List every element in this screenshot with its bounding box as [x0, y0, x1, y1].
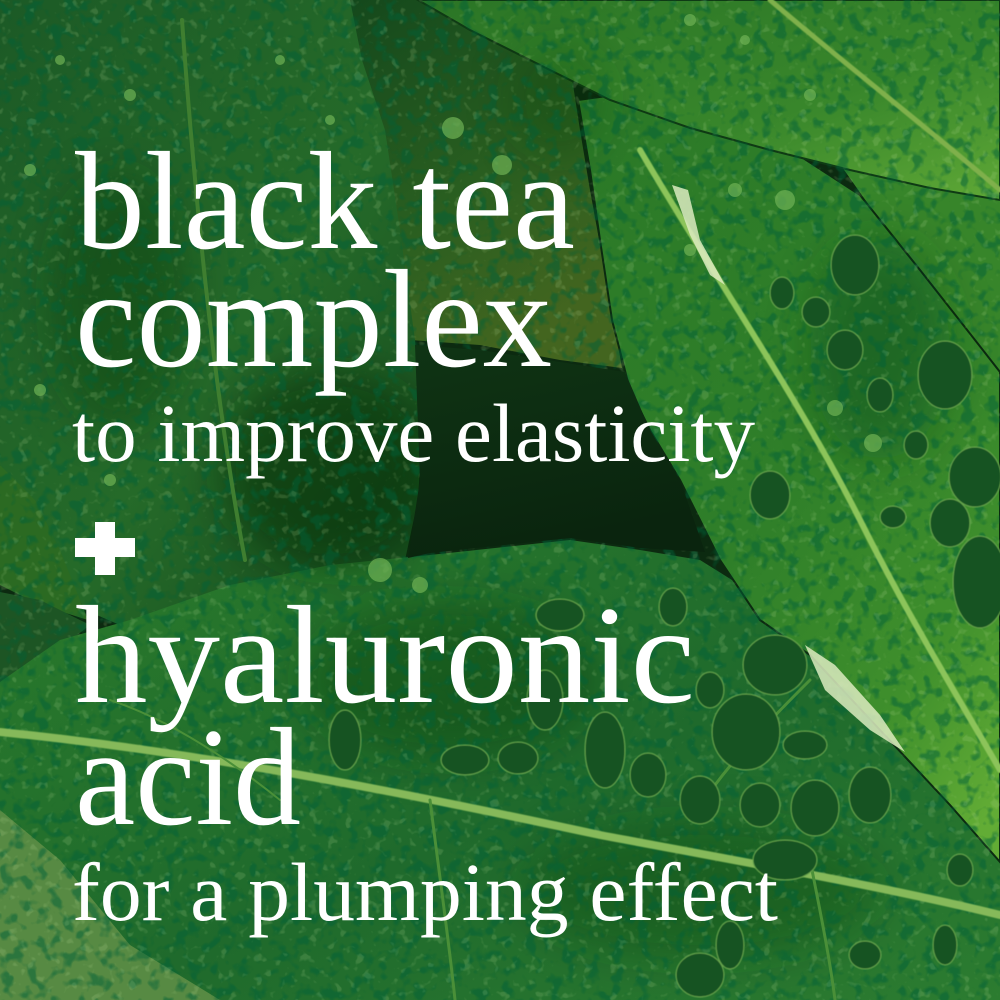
water droplets: [329, 235, 1000, 997]
leaf: behind right: [830, 150, 1000, 375]
subtitle: for a plumping effect: for a plumping effect: [72, 846, 778, 938]
title: black tea complex: black tea: [75, 124, 575, 279]
title: hyaluronic acid: acid: [75, 700, 301, 855]
leaf: small far left: [0, 465, 88, 620]
leaf: bottom: [0, 540, 1000, 1000]
leaf: top centre: [345, 0, 622, 368]
leaf: small lower left: [0, 592, 90, 690]
icon: plus sign: [75, 522, 135, 575]
leaf: top right: [418, 0, 1000, 200]
highlight glints on right leaf: [672, 185, 905, 752]
small droplets: [24, 14, 882, 593]
dark gap overlay: [408, 345, 705, 558]
subtitle: to improve elasticity: to improve elasticity: [72, 387, 755, 479]
title: hyaluronic acid: [75, 578, 695, 855]
leaf: large right: [578, 90, 1000, 862]
leaf: left: [0, 0, 422, 625]
title: black tea complex: complex: [75, 242, 552, 397]
title: black tea complex: [75, 124, 575, 397]
title: hyaluronic acid: hyaluronic: [75, 578, 695, 733]
leaf: pale bottom left: [0, 810, 220, 1000]
